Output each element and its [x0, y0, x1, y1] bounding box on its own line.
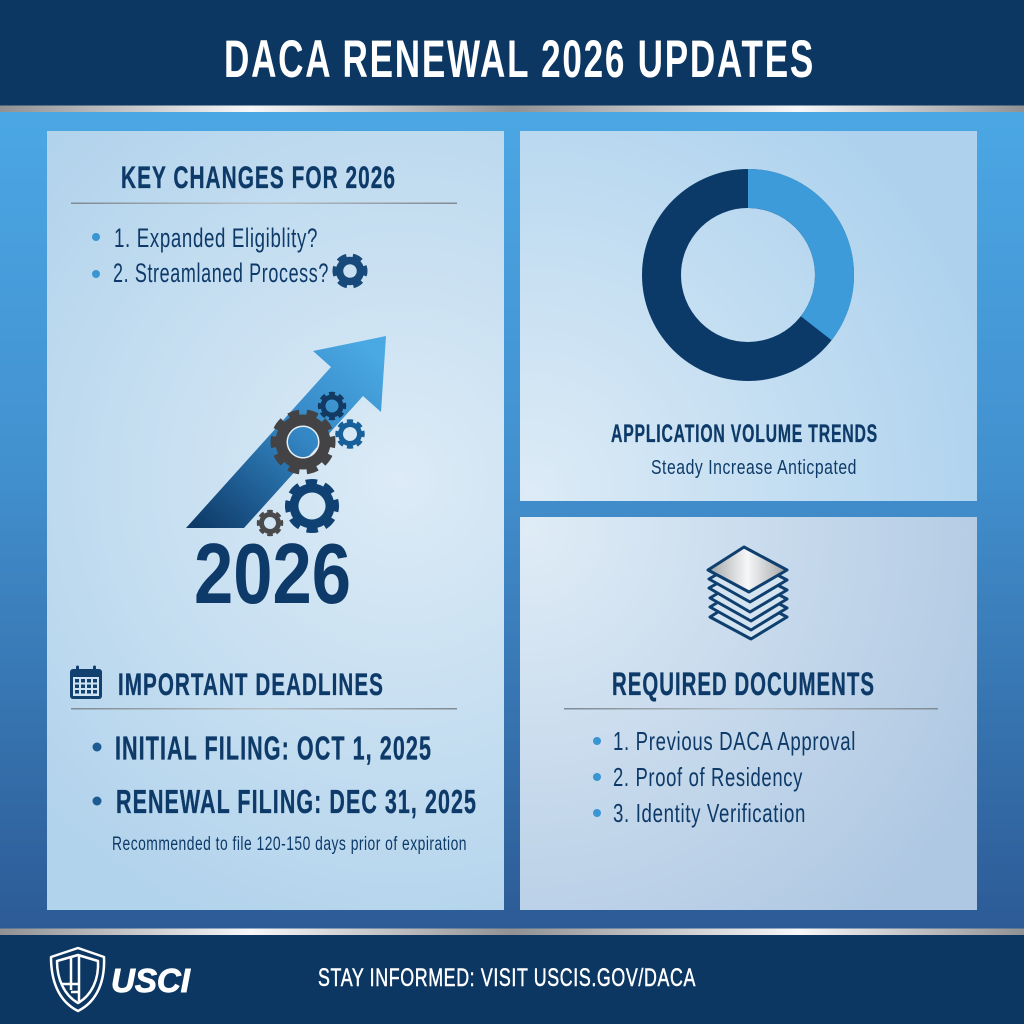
- list: required documents: 3. Identity Verification: [613, 798, 806, 828]
- deadline: renewal filing: [92, 784, 477, 821]
- gear: top dark: [317, 391, 347, 421]
- panel: key changes and deadlines: [47, 131, 504, 910]
- deadline: renewal filing: RENEWAL FILING: DEC 31, 2025: [116, 784, 477, 821]
- icon: small gear: [332, 253, 368, 289]
- heading: application volume trends: APPLICATION VOLUME TRENDS: [611, 420, 878, 448]
- heading: important deadlines: IMPORTANT DEADLINES: [118, 666, 384, 702]
- heading: key changes: KEY CHANGES FOR 2026: [121, 159, 396, 195]
- panel: application volume: [520, 131, 977, 501]
- deadline: initial filing: [92, 730, 432, 768]
- list: required documents: [593, 726, 856, 828]
- donut chart: [662, 188, 834, 362]
- logo: shield: [51, 948, 104, 1011]
- caption: steady increase: Steady Increase Anticpated: [651, 456, 857, 479]
- list: required documents: 1. Previous DACA Approval: [613, 726, 856, 756]
- arrow: [186, 336, 386, 528]
- list: key changes: [92, 223, 329, 288]
- illustration: arrow with gears: [186, 336, 386, 537]
- gear: blue: [334, 418, 366, 450]
- icon: calendar: [70, 666, 102, 699]
- header banner: [0, 0, 1024, 112]
- gear: large grey: [269, 408, 337, 476]
- heading: required documents: REQUIRED DOCUMENTS: [612, 666, 875, 702]
- list: required documents: 2. Proof of Residency: [613, 762, 803, 792]
- panel: required documents: [520, 517, 977, 910]
- gear: small grey: [256, 509, 284, 537]
- footer call to action: STAY INFORMED: VISIT USCIS.GOV/DACA: [318, 964, 696, 992]
- list: key changes: 1. Expanded Eligiblity?: [114, 223, 318, 253]
- list: key changes: 2. Streamlaned Process?: [113, 258, 329, 288]
- logo: USCI wordmark: USCI: [111, 962, 191, 999]
- icon: document stack: [708, 547, 787, 639]
- year 2026: 2026: [194, 527, 351, 622]
- deadline: initial filing: INITIAL FILING: OCT 1, 2025: [115, 730, 432, 768]
- note: filing recommendation: Recommended to file 120-150 days prior of expiration: [112, 834, 467, 855]
- gear: navy: [283, 477, 341, 535]
- footer banner: [0, 928, 1024, 1024]
